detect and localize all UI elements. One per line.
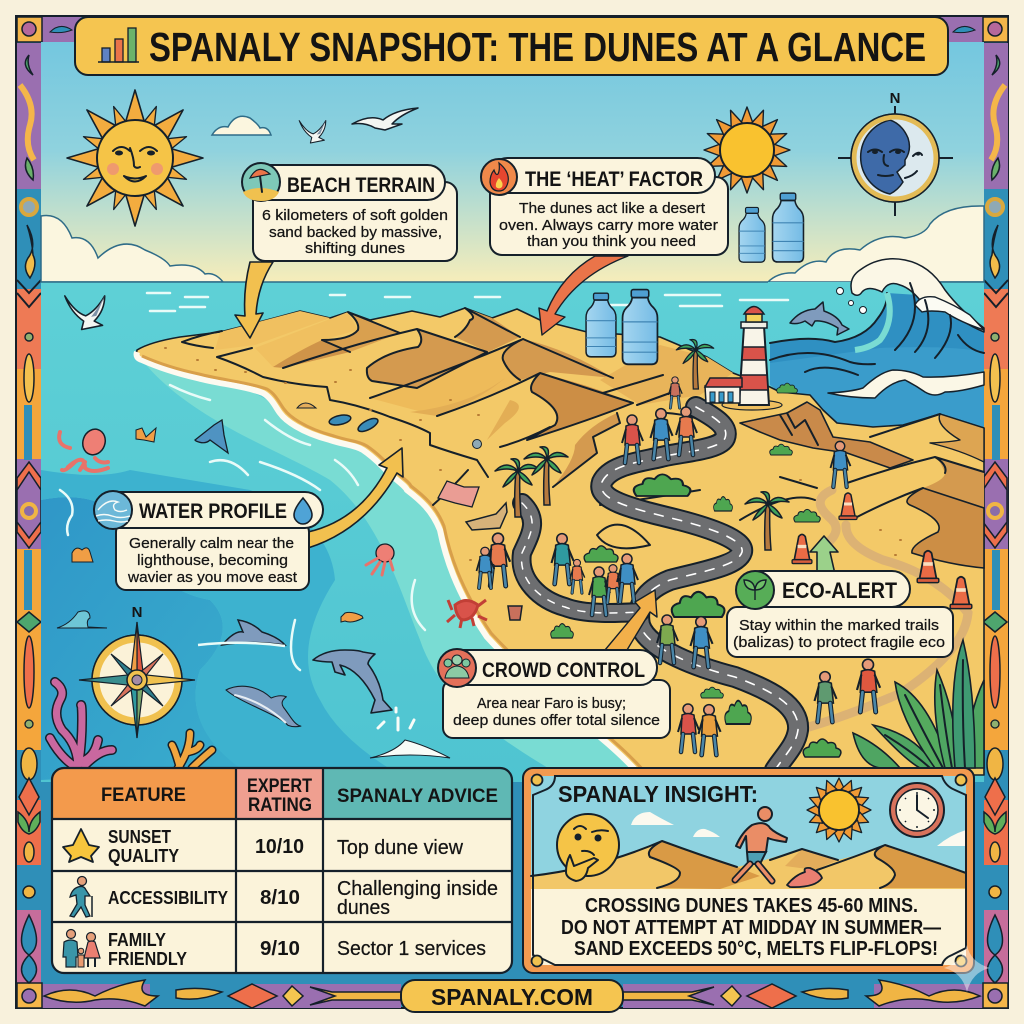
beach towel and lounger xyxy=(438,481,507,530)
light dune faces xyxy=(215,311,358,368)
cloud: small top xyxy=(212,116,271,135)
small wave crest xyxy=(57,611,107,628)
row: accessibility: 8/10 xyxy=(260,887,300,909)
water bottles: sky xyxy=(739,193,803,262)
table outline xyxy=(52,768,512,973)
body text: oven. Always carry more water xyxy=(499,217,718,234)
body text: lighthouse, becoming xyxy=(137,552,288,569)
body text: than you think you need xyxy=(527,233,696,250)
sea wave strokes xyxy=(60,293,788,670)
bushes xyxy=(551,383,841,757)
coral orange xyxy=(172,733,212,768)
panel: feature table xyxy=(52,768,512,973)
deep water xyxy=(41,497,250,780)
panel: spanaly insight xyxy=(523,768,974,973)
body text: The dunes act like a desert xyxy=(519,200,706,217)
header cell: spanaly advice xyxy=(323,768,512,819)
row: accessibility: dunes xyxy=(337,897,390,919)
icon: running man xyxy=(735,807,787,881)
heading: CROWD CONTROL xyxy=(482,659,645,682)
dune ridge lines xyxy=(283,308,633,447)
insight dune scene xyxy=(531,841,966,889)
shallow foam band xyxy=(142,360,640,775)
panel: beach terrain xyxy=(242,163,457,261)
body text xyxy=(499,200,718,250)
icon: thinking face xyxy=(557,814,619,881)
footer text: SPANALY.COM xyxy=(431,984,593,1010)
panel: water profile xyxy=(94,491,323,590)
people on the road and dunes xyxy=(476,377,880,755)
octopus large xyxy=(59,426,109,471)
heading: ECO-ALERT xyxy=(782,578,898,603)
dolphin: surface xyxy=(198,620,285,646)
insight frame xyxy=(533,776,966,965)
icon: beach umbrella xyxy=(242,163,280,201)
icon: bar chart xyxy=(98,28,139,62)
icon: wave xyxy=(94,491,132,529)
insight text xyxy=(561,895,941,960)
dune shadows xyxy=(322,312,400,352)
sand bucket xyxy=(508,606,522,620)
palm trees xyxy=(495,339,789,550)
title banner xyxy=(75,17,948,75)
icon: leaf sprout xyxy=(736,571,774,609)
sand and dunes xyxy=(137,308,984,775)
icon: flame xyxy=(481,159,517,195)
icon: family xyxy=(63,930,100,967)
arrow: water profile xyxy=(308,448,403,548)
mid water band xyxy=(41,470,400,775)
body text xyxy=(262,207,448,257)
row: accessibility: ACCESSIBILITY xyxy=(108,888,228,908)
sun-moon compass xyxy=(838,90,953,216)
row: accessibility: Challenging inside xyxy=(337,878,498,900)
header cell: expert rating xyxy=(236,768,323,819)
right sea blue water xyxy=(770,293,984,428)
heading: BEACH TERRAIN xyxy=(287,174,435,197)
icon: crowd xyxy=(438,649,476,687)
road: branch to the palms xyxy=(522,503,640,613)
row: family friendly: 9/10 xyxy=(260,938,300,960)
table header text: RATING xyxy=(248,795,312,816)
road: main winding road xyxy=(601,407,798,770)
row: family friendly xyxy=(108,930,486,969)
insight heading: SPANALY INSIGHT: xyxy=(558,781,758,807)
body text xyxy=(733,617,945,651)
lighthouse xyxy=(705,306,782,410)
gull: sky small xyxy=(299,121,326,143)
water bottles: on dunes xyxy=(586,290,657,364)
sand speckles xyxy=(165,348,901,700)
row: accessibility xyxy=(108,878,498,919)
row: family friendly: FRIENDLY xyxy=(108,949,187,969)
insight text: SAND EXCEEDS 50°C, MELTS FLIP-FLOPS! xyxy=(574,938,938,960)
heading: WATER PROFILE xyxy=(139,500,287,523)
row: sunset quality: 10/10 xyxy=(255,836,304,858)
big green plant xyxy=(853,640,984,768)
compass rose xyxy=(79,604,195,738)
angel fish xyxy=(195,420,228,453)
table header text: SPANALY ADVICE xyxy=(337,786,498,807)
row: sunset quality: Top dune view xyxy=(337,837,464,859)
icon: star xyxy=(63,829,99,862)
body text: 6 kilometers of soft golden xyxy=(262,207,448,224)
insight clouds xyxy=(631,812,966,846)
white water crest xyxy=(370,740,450,758)
sun: heat factor xyxy=(704,107,790,193)
sun with face xyxy=(67,90,203,226)
coral pink xyxy=(50,682,112,768)
arrow: beach terrain xyxy=(235,262,273,338)
arrow: eco alert xyxy=(810,536,838,574)
watermark sparkle xyxy=(944,945,990,992)
dolphin: diving xyxy=(222,675,309,730)
compass rose: N xyxy=(132,604,142,621)
footer pill xyxy=(401,980,623,1012)
body text: Area near Faro is busy; xyxy=(477,695,626,712)
splash xyxy=(378,708,414,730)
body text: deep dunes offer total silence xyxy=(453,712,660,729)
right cliff xyxy=(740,402,913,468)
wet sand edge xyxy=(142,356,644,771)
insight text: DO NOT ATTEMPT AT MIDDAY IN SUMMER— xyxy=(561,917,941,939)
row: family friendly: FAMILY xyxy=(108,930,166,950)
crab xyxy=(447,600,487,628)
sky xyxy=(41,42,984,282)
cloud: low right xyxy=(768,206,984,282)
panel: crowd control xyxy=(438,649,670,738)
row: sunset quality xyxy=(108,827,464,866)
dolphin: near wave xyxy=(790,302,849,335)
body text xyxy=(453,695,660,729)
row: sunset quality: SUNSET xyxy=(108,827,171,847)
insight text: CROSSING DUNES TAKES 45-60 MINS. xyxy=(585,895,918,917)
starfish and coral bits xyxy=(72,428,156,562)
icon: drop xyxy=(294,498,312,524)
table header text xyxy=(101,776,498,816)
gull: sea xyxy=(65,296,105,330)
body text xyxy=(127,535,298,586)
body text: sand backed by massive, xyxy=(269,224,442,241)
body text: wavier as you move east xyxy=(127,569,298,586)
gull: sky large xyxy=(352,108,418,130)
horizon line xyxy=(41,281,984,283)
body text: Stay within the marked trails xyxy=(739,617,939,634)
corner rivets xyxy=(532,774,966,966)
icon: flip flops xyxy=(787,868,822,887)
body text: (balizas) to protect fragile eco xyxy=(733,634,945,651)
sea xyxy=(41,282,984,782)
body text: Generally calm near the xyxy=(129,535,294,552)
row: family friendly: Sector 1 services xyxy=(337,938,486,960)
white shoreline foam xyxy=(137,352,640,775)
panel: eco alert xyxy=(727,571,953,657)
right dunes xyxy=(930,414,984,462)
sun-moon compass: N xyxy=(890,90,900,107)
small orange fish xyxy=(341,612,363,622)
big wave xyxy=(770,259,984,398)
cloud: low left xyxy=(41,215,223,282)
dolphin: jumping xyxy=(313,650,392,713)
trail: tan footpath with balizas xyxy=(809,490,968,727)
row: sunset quality: QUALITY xyxy=(108,846,179,866)
header cell: feature xyxy=(52,768,236,819)
body text: shifting dunes xyxy=(305,240,405,257)
table border xyxy=(52,768,512,973)
panel: heat factor xyxy=(481,158,728,255)
octopus small xyxy=(366,544,394,575)
marker cones xyxy=(792,493,972,609)
arrow: crowd control xyxy=(605,590,657,650)
table header text: FEATURE xyxy=(101,785,186,806)
icon: clock xyxy=(890,783,944,837)
icon: walker xyxy=(70,876,92,917)
icon: sun xyxy=(807,778,871,842)
arrow: heat factor xyxy=(539,256,628,335)
heading: THE ‘HEAT’ FACTOR xyxy=(525,168,703,191)
table header text: EXPERT xyxy=(247,776,312,797)
